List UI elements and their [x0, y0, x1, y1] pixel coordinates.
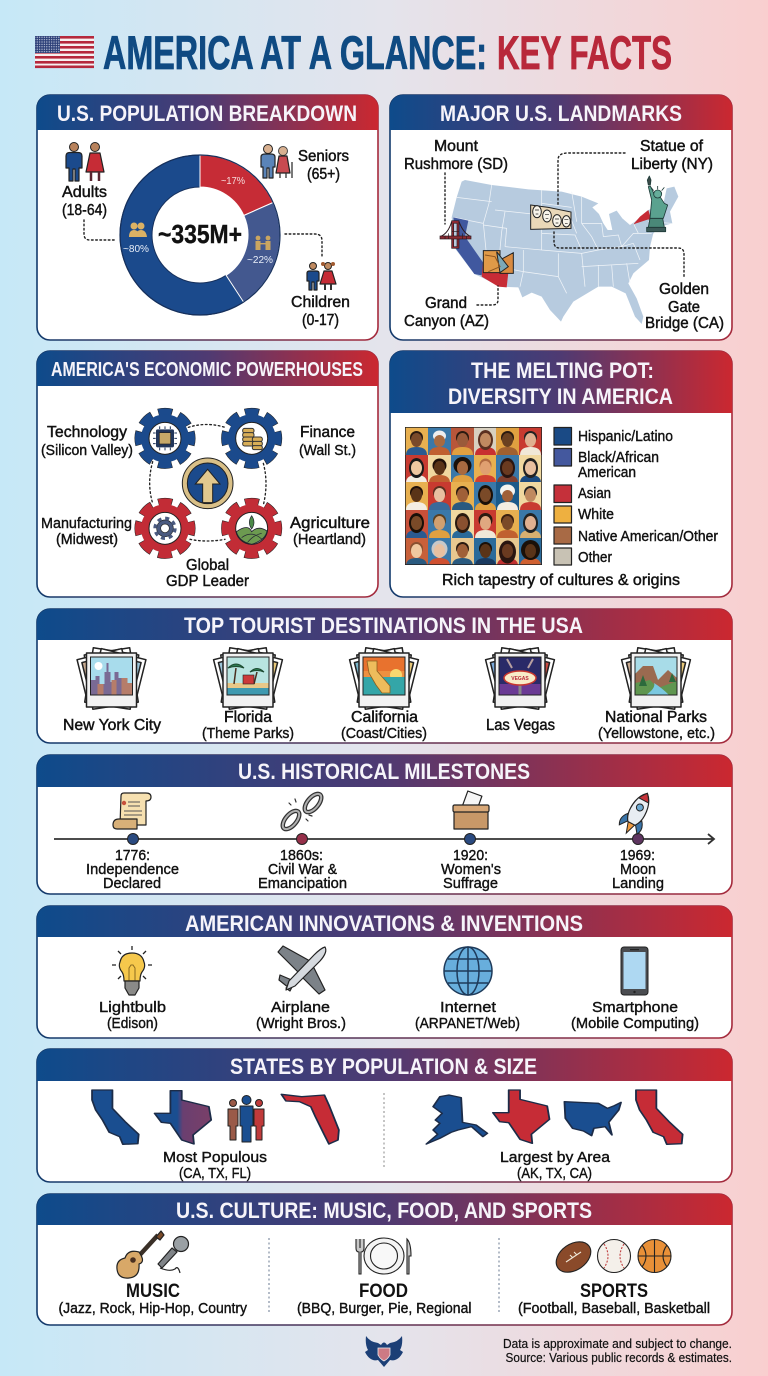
legend: White [578, 506, 614, 523]
label: global GDP leader: Global [186, 557, 229, 574]
panel: landmarks [390, 95, 732, 340]
label: Florida: Florida [224, 709, 272, 726]
label: mount rushmore: Mount [434, 138, 479, 155]
title: KEY FACTS [497, 26, 672, 79]
footnote: Source: Various public records & estimates. [506, 1351, 732, 1365]
panel: tourist destinations [37, 609, 732, 743]
label: California: California [351, 709, 418, 726]
legend: Asian [578, 485, 611, 502]
icon: mount rushmore [531, 205, 571, 229]
label: mount rushmore: Rushmore (SD) [404, 156, 508, 173]
donut chart [120, 155, 280, 315]
label: 1860s: 1860s: [280, 847, 323, 864]
label: airplane [256, 999, 346, 1032]
label: National Parks: (Yellowstone, etc.) [598, 725, 715, 742]
icon: microphone [158, 1236, 188, 1273]
label: grand canyon: Canyon (AZ) [404, 313, 489, 330]
label: 1776: 1776: [115, 847, 150, 864]
label: golden gate bridge [645, 281, 724, 332]
icon: ballot box [453, 791, 489, 829]
heading: melting pot: DIVERSITY IN AMERICA [448, 384, 673, 409]
icon: adults [66, 142, 104, 181]
portrait mosaic [405, 427, 542, 566]
label: children: Children [291, 294, 350, 311]
photo: Las Vegas: VEGAS [511, 676, 529, 682]
heading: milestones: U.S. HISTORICAL MILESTONES [238, 759, 530, 784]
label: airplane: Airplane [271, 999, 330, 1016]
label: 1969: 1969: [620, 847, 655, 864]
icon: rocket [616, 788, 658, 839]
gear: agriculture [220, 496, 284, 560]
heading: melting pot [448, 358, 673, 409]
label: largest by area [500, 1149, 611, 1182]
label: California [341, 709, 427, 742]
label: seniors: (65+) [307, 166, 340, 183]
label: 1860s: Civil War & [268, 861, 337, 878]
label: internet [415, 999, 520, 1032]
label: food: (BBQ, Burger, Pie, Regional [297, 1300, 472, 1317]
connector: children [285, 234, 322, 256]
icon: growth arrow [182, 458, 233, 509]
label: 1776: Declared [103, 875, 161, 892]
label: most populous: Most Populous [163, 1149, 267, 1166]
panel: innovations [37, 906, 732, 1038]
label: sports: (Football, Baseball, Basketball [518, 1300, 710, 1317]
legend: Other [578, 549, 612, 566]
label: music: (Jazz, Rock, Hip-Hop, Country [58, 1300, 247, 1317]
label: 1920: 1920: [453, 847, 488, 864]
legend: Native American/Other [578, 528, 718, 545]
label: technology [41, 424, 133, 459]
landmark connectors [445, 153, 684, 305]
label: manufacturing [41, 515, 132, 548]
icon: children [307, 262, 336, 290]
label: food [297, 1281, 472, 1317]
label: sports [518, 1281, 710, 1317]
legend: Black/African [578, 449, 659, 466]
icon: scroll [113, 793, 151, 829]
label: food: FOOD [359, 1281, 408, 1302]
heading: landmarks: MAJOR U.S. LANDMARKS [440, 101, 682, 126]
heading: innovations: AMERICAN INNOVATIONS & INVENTIONS [185, 911, 583, 936]
legend: American [578, 464, 636, 481]
photo: Las Vegas [486, 648, 554, 709]
label: smartphone: (Mobile Computing) [571, 1015, 699, 1032]
icon: lightbulb [112, 946, 152, 995]
heading: tourist: TOP TOURIST DESTINATIONS IN THE USA [184, 613, 583, 638]
label: grand canyon [404, 295, 489, 330]
photo: National Parks [622, 648, 690, 709]
panel: population breakdown [37, 95, 378, 340]
icon: globe [444, 947, 492, 995]
label: 1860s [258, 847, 347, 892]
label: lightbulb: (Edison) [107, 1015, 158, 1032]
icon: grand canyon [483, 251, 513, 273]
label: music: MUSIC [126, 1281, 180, 1302]
panel: melting pot [390, 351, 732, 597]
icon: fork, plate and knife [356, 1238, 411, 1274]
label: 1776 [86, 847, 179, 892]
gear diagram [133, 406, 284, 560]
label: Florida [202, 709, 294, 742]
label: internet: (ARPANET/Web) [415, 1015, 520, 1032]
label: grand canyon: Grand [425, 295, 467, 312]
label: Las Vegas: Las Vegas [486, 717, 555, 734]
label: most populous: (CA, TX, FL) [179, 1165, 251, 1182]
label: finance: (Wall St.) [299, 442, 356, 459]
legend: Hispanic/Latino [578, 428, 673, 445]
timeline arrow [54, 834, 714, 844]
label: agriculture [290, 515, 370, 548]
label: music [58, 1281, 247, 1317]
label: finance: Finance [300, 424, 355, 441]
state shapes: most populous [92, 1090, 339, 1144]
icon: US flag [35, 36, 94, 68]
label: technology: (Silicon Valley) [41, 442, 133, 459]
map of USA with landmark icons [440, 176, 678, 324]
icon: people [228, 1096, 264, 1142]
photo: Florida [214, 648, 282, 709]
label: largest by area: Largest by Area [500, 1149, 611, 1166]
gear: manufacturing [133, 496, 197, 560]
heading: economic: AMERICA'S ECONOMIC POWERHOUSES [51, 359, 363, 381]
label: seniors [298, 148, 349, 183]
title: AMERICA AT A GLANCE: [103, 26, 487, 79]
panel: culture [37, 1194, 732, 1325]
divider [383, 1093, 385, 1168]
legend [554, 428, 718, 566]
heading: culture: U.S. CULTURE: MUSIC, FOOD, AND SPORTS [176, 1198, 592, 1223]
icon: golden gate bridge [440, 221, 471, 248]
label: 1920 [441, 847, 501, 892]
label: global GDP leader [166, 557, 249, 590]
panel: states [37, 1049, 732, 1182]
label: global GDP leader: GDP Leader [166, 573, 249, 590]
label: manufacturing: Manufacturing [41, 515, 132, 532]
donut chart: ~335M+ [158, 219, 242, 249]
photo: New York City [77, 648, 146, 709]
label: 1969: Moon [620, 861, 656, 878]
highlighted states [453, 217, 484, 275]
label: statue of liberty: Statue of [640, 138, 704, 155]
label: National Parks [598, 709, 715, 742]
label: golden gate bridge: Gate [668, 299, 700, 316]
label: 1920: Suffrage [443, 875, 498, 892]
label: National Parks: National Parks [605, 709, 707, 726]
heading: melting pot: THE MELTING POT: [471, 358, 654, 383]
label: largest by area: (AK, TX, CA) [517, 1165, 592, 1182]
label: golden gate bridge: Golden [659, 281, 709, 298]
label: 1920: Women's [441, 861, 501, 878]
heading: states: STATES BY POPULATION & SIZE [230, 1054, 537, 1079]
label: mount rushmore [404, 138, 508, 173]
icon: sports balls [550, 1235, 671, 1279]
heading: population: U.S. POPULATION BREAKDOWN [57, 101, 357, 126]
label: children: (0-17) [302, 312, 339, 329]
connector: adults [84, 220, 115, 240]
photo: California [350, 648, 418, 709]
divider [269, 1238, 499, 1312]
label: agriculture: (Heartland) [293, 531, 366, 548]
icon: statue of liberty [647, 176, 668, 232]
dotted links [150, 424, 266, 541]
donut chart: ~22% [247, 255, 273, 266]
label: statue of liberty [631, 138, 713, 173]
label: most populous [163, 1149, 267, 1182]
label: 1969: Landing [612, 875, 664, 892]
label: lightbulb: Lightbulb [99, 999, 166, 1016]
label: internet: Internet [440, 999, 497, 1016]
panel: economic powerhouses [37, 351, 378, 597]
icon: smartphone [621, 947, 648, 995]
label: agriculture: Agriculture [290, 515, 370, 532]
gear: finance [220, 406, 284, 470]
label: 1776: Independence [86, 861, 179, 878]
icon: guitar [117, 1231, 164, 1278]
label: manufacturing: (Midwest) [56, 531, 118, 548]
state shapes: largest by area [426, 1090, 683, 1144]
label: New York City: New York City [63, 717, 161, 734]
icon: eagle seal [365, 1336, 403, 1367]
donut chart: ~80% [123, 244, 149, 255]
gear: technology [133, 406, 197, 470]
donut chart: ~17% [221, 176, 245, 187]
label: Florida: (Theme Parks) [202, 725, 294, 742]
timeline dots [128, 834, 644, 844]
icon: seniors [261, 144, 292, 178]
label: airplane: (Wright Bros.) [256, 1015, 346, 1032]
label: sports: SPORTS [580, 1281, 648, 1302]
caption: tapestry: Rich tapestry of cultures & origins [442, 572, 680, 589]
label: statue of liberty: Liberty (NY) [631, 156, 713, 173]
label: finance [299, 424, 356, 459]
label: adults [62, 184, 107, 219]
label: seniors: Seniors [298, 148, 349, 165]
icon: airplane [278, 946, 326, 994]
panel: historical milestones [37, 755, 732, 894]
label: smartphone: Smartphone [592, 999, 678, 1016]
label: California: (Coast/Cities) [341, 725, 427, 742]
footnote [503, 1337, 732, 1365]
label: adults: Adults [62, 184, 107, 201]
label: children [291, 294, 350, 329]
label: smartphone [571, 999, 699, 1032]
label: 1860s: Emancipation [258, 875, 347, 892]
label: golden gate bridge: Bridge (CA) [645, 315, 724, 332]
label: 1969 [612, 847, 664, 892]
label: adults: (18-64) [62, 202, 107, 219]
footnote: Data is approximate and subject to change. [503, 1337, 732, 1351]
label: lightbulb [99, 999, 166, 1032]
icon: broken chain [280, 791, 324, 832]
label: technology: Technology [47, 424, 127, 441]
